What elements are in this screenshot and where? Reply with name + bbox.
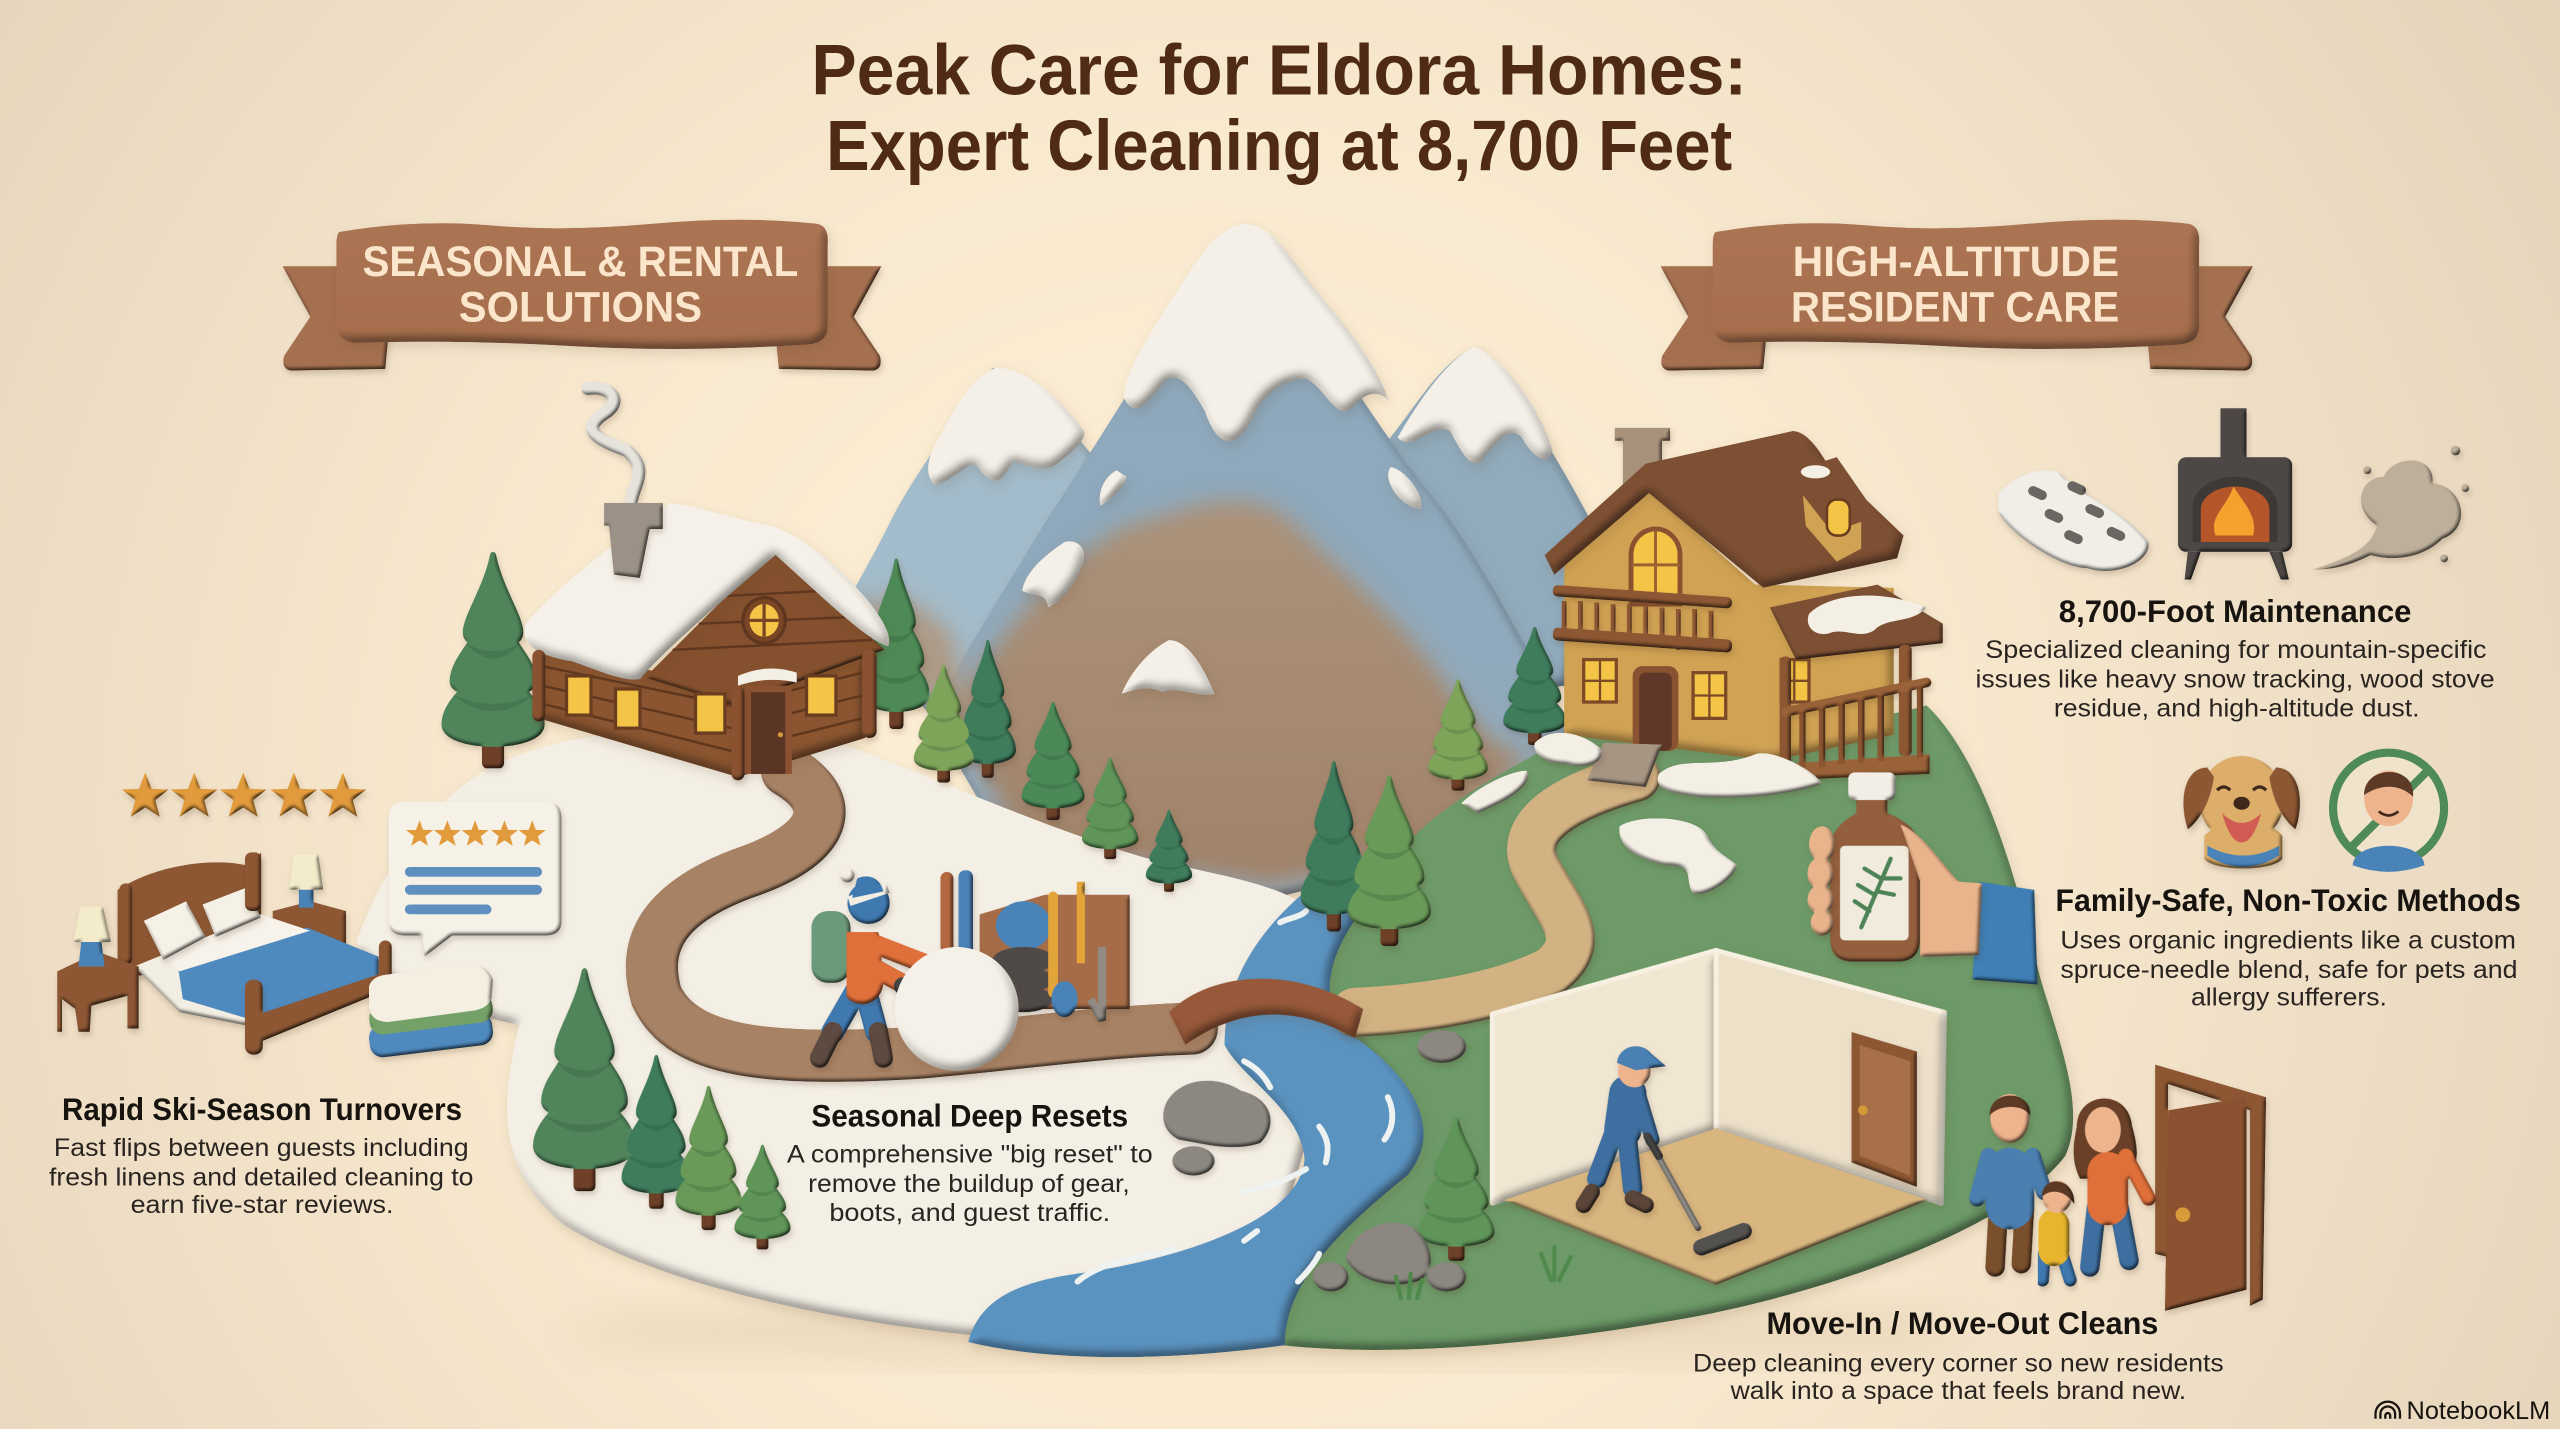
text: seasonal deep resets: A comprehensive "big reset" to — [787, 1140, 1153, 1168]
bed with nightstands — [57, 852, 392, 1055]
central peak — [931, 224, 1576, 898]
chimney — [1615, 428, 1670, 487]
flame — [2214, 487, 2254, 536]
round attic window — [743, 598, 785, 643]
text: 8,700-foot maintenance: issues like heavy snow tracking, wood stove — [1976, 665, 2495, 693]
icon: dust cloud — [2312, 446, 2469, 570]
chimney smoke — [588, 388, 639, 506]
open door — [2155, 1064, 2266, 1311]
banner: seasonal and rental solutions — [282, 220, 882, 371]
river ripples — [1078, 911, 1392, 1282]
door — [744, 686, 792, 774]
snow patches on green hill — [1461, 771, 1737, 894]
family at door — [1977, 1064, 2266, 1311]
banner: seasonal and rental solutions: SEASONAL & RENTAL — [362, 238, 798, 285]
mother — [2073, 1098, 2149, 1267]
right nightstand and lamp — [273, 854, 346, 963]
ground shadow — [571, 1295, 1976, 1367]
left wall — [1492, 950, 1716, 1203]
lit windows — [567, 676, 836, 733]
icon: snow tracks — [1998, 470, 2149, 571]
dirt path — [652, 771, 1192, 1056]
entry snow mounds — [1534, 733, 1822, 798]
headboard — [118, 852, 261, 976]
rocks — [1163, 1030, 1466, 1291]
mattress and sheets — [134, 914, 379, 1025]
entry steps — [1587, 743, 1662, 787]
folded linen stack — [367, 963, 495, 1059]
text: family-safe methods: Family-Safe, Non-Toxic Methods — [2056, 883, 2521, 918]
head and hat — [840, 868, 890, 924]
green hill — [1282, 705, 2073, 1350]
text: family-safe methods — [2056, 883, 2521, 1012]
text: rapid ski-season turnovers: fresh linens and detailed cleaning to — [49, 1163, 473, 1191]
bridge — [1169, 979, 1363, 1045]
snowy hill base — [356, 727, 1355, 1336]
sleeve — [1972, 882, 2038, 984]
banner: high-altitude resident care: RESIDENT CARE — [1791, 284, 2119, 331]
log lines — [542, 666, 862, 751]
window snow ledge — [738, 668, 797, 686]
footboard — [119, 852, 392, 1055]
legs — [820, 989, 883, 1058]
gear locker — [940, 870, 1130, 1020]
hand — [1807, 824, 1982, 957]
cabin walls — [539, 650, 865, 777]
icon: person in no-toxins ring — [2333, 753, 2444, 872]
text: 8,700-foot maintenance: residue, and high-altitude dust. — [2054, 695, 2420, 723]
skier pushing snowball with gear — [811, 868, 1130, 1071]
cleaner figure — [1584, 1049, 1660, 1205]
text: 8,700-foot maintenance: Specialized cleaning for mountain-specific — [1985, 636, 2487, 664]
text: move-in move-out cleans: walk into a space that feels brand new. — [1730, 1377, 2186, 1405]
main roof — [1544, 431, 1904, 588]
child — [2042, 1180, 2073, 1280]
front snow trees — [536, 971, 1492, 1261]
text: rapid ski-season turnovers — [49, 1092, 473, 1219]
snowball — [895, 947, 1019, 1071]
vacuum — [1647, 1136, 1744, 1247]
right wall — [1716, 950, 1944, 1203]
room door — [1851, 1032, 1917, 1187]
icon: wood stove — [2178, 408, 2292, 580]
spruce label sprig — [1855, 859, 1900, 927]
bottle — [1830, 772, 1920, 962]
NotebookLM logo: NotebookLM — [2407, 1397, 2550, 1425]
text: rapid ski-season turnovers: Rapid Ski-Season Turnovers — [62, 1092, 462, 1127]
text: seasonal deep resets: Seasonal Deep Resets — [811, 1099, 1128, 1134]
hand holding spruce bottle — [1807, 772, 2038, 984]
banner: high-altitude resident care — [1660, 220, 2253, 371]
text: move-in move-out cleans — [1693, 1306, 2224, 1405]
stone chimney — [604, 503, 663, 578]
review speech bubble — [389, 802, 562, 957]
pillows — [144, 888, 261, 960]
grass tufts — [1396, 1247, 1571, 1298]
river — [968, 895, 1424, 1357]
title: Peak Care for Eldora Homes: — [811, 31, 1747, 111]
corner logs — [532, 650, 877, 780]
gable — [645, 549, 885, 705]
text: family-safe methods: Uses organic ingredients like a custom — [2060, 927, 2516, 955]
snow caps — [928, 224, 1553, 695]
text: 8,700-foot maintenance — [1976, 594, 2495, 723]
text: family-safe methods: spruce-needle blend, safe for pets and — [2060, 956, 2518, 984]
left peak — [841, 367, 1110, 751]
right peak — [1388, 346, 1600, 702]
arched window — [1631, 529, 1680, 604]
brown lower slopes — [862, 500, 1531, 885]
text: 8,700-foot maintenance: 8,700-Foot Maintenance — [2059, 594, 2411, 629]
porch railing — [1776, 645, 1930, 780]
text: seasonal deep resets: boots, and guest traffic. — [829, 1199, 1110, 1227]
jacket and arms — [859, 940, 937, 995]
title — [811, 31, 1747, 186]
backpack — [811, 911, 851, 983]
text: move-in move-out cleans: Deep cleaning every corner so new residents — [1693, 1349, 2224, 1377]
text: family-safe methods: allergy sufferers. — [2191, 984, 2387, 1012]
text: seasonal deep resets: remove the buildup of gear, — [808, 1170, 1130, 1198]
front door and windows — [1584, 660, 1809, 751]
icon: happy dog — [2183, 756, 2300, 869]
text: move-in move-out cleans: Move-In / Move-Out Cleans — [1767, 1306, 2158, 1341]
mountains — [841, 224, 1600, 898]
porch roof with snow — [1770, 584, 1943, 660]
father — [1977, 1094, 2044, 1267]
walls — [1564, 490, 1894, 761]
floor — [1504, 1128, 1928, 1285]
empty room with vacuuming cleaner — [1492, 950, 1944, 1285]
text: rapid ski-season turnovers: earn five-star reviews. — [131, 1191, 393, 1219]
balcony — [1552, 585, 1732, 653]
log cabin — [524, 388, 889, 780]
sand path — [1355, 777, 1636, 1012]
gable log lines — [673, 591, 872, 650]
roof snow — [524, 503, 889, 680]
banner: high-altitude resident care: HIGH-ALTITUDE — [1793, 238, 2119, 285]
left nightstand and lamp — [57, 906, 139, 1032]
yellow mountain house — [1534, 428, 1943, 798]
dormer — [1786, 457, 1878, 562]
text: seasonal deep resets — [787, 1099, 1153, 1227]
banner: seasonal and rental solutions: SOLUTIONS — [459, 284, 702, 331]
title: Expert Cleaning at 8,700 Feet — [826, 106, 1732, 186]
review stars — [122, 772, 367, 817]
text: rapid ski-season turnovers: Fast flips between guests including — [54, 1134, 469, 1162]
back trees — [444, 555, 1564, 946]
